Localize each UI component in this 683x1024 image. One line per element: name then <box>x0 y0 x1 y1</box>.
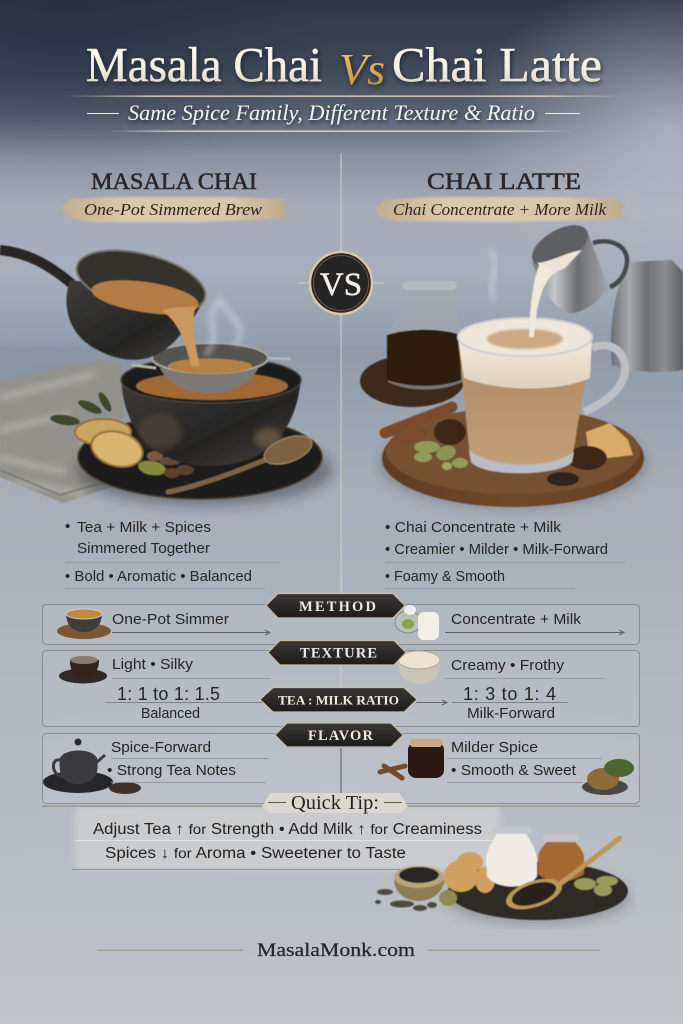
heading: Masala Chai column: MASALA CHAI <box>91 169 257 195</box>
brass bowl of tea <box>394 866 445 901</box>
towel <box>0 359 124 503</box>
ratio right <box>452 684 568 722</box>
jaggery <box>444 852 495 893</box>
heading: Masala Chai column <box>60 169 288 222</box>
jaggery and cloves <box>547 423 633 486</box>
badge: tea milk ratio: TEA : MILK RATIO <box>278 692 399 708</box>
milk jar <box>486 826 537 886</box>
title: Chai Latte: Chai Latte <box>392 37 602 92</box>
ginger slices <box>75 419 147 472</box>
panel: flavor: • Smooth & Sweet <box>451 762 577 779</box>
arrow: method left <box>112 630 270 635</box>
panel: flavor: Spice-Forward <box>111 739 211 756</box>
icon: concentrate and milk jars <box>395 605 439 640</box>
scattered tea leaves <box>375 889 437 911</box>
badge: flavor <box>275 723 403 747</box>
photo: masala chai pour <box>0 239 333 506</box>
brush banner left <box>60 197 288 222</box>
badge: method: METHOD <box>299 599 376 615</box>
left bullet list <box>65 518 280 589</box>
quick tip panel: Quick Tip: <box>291 792 379 814</box>
wooden spoon with peppercorns <box>502 838 620 915</box>
brush banner right <box>375 197 625 222</box>
gold spoon <box>168 430 316 492</box>
honey jar <box>538 834 584 882</box>
badge: texture: TEXTURE <box>300 646 377 662</box>
title: vs script: Vs <box>339 45 385 94</box>
VS badge <box>298 252 384 314</box>
spices left of cup <box>414 419 468 470</box>
bowl <box>121 357 301 466</box>
left bullet list: • Bold • Aromatic • Balanced <box>65 568 252 585</box>
panel: method <box>42 604 640 644</box>
heading: Chai Latte column: Chai Concentrate + More Milk <box>393 200 606 219</box>
cinnamon sticks <box>385 407 452 444</box>
right bullet list: • Foamy & Smooth <box>385 568 505 585</box>
slate board <box>446 862 630 924</box>
footer with website: MasalaMonk.com <box>257 940 415 961</box>
glass cup <box>458 318 625 473</box>
steam <box>490 250 495 300</box>
panel: flavor <box>42 734 640 804</box>
center divider <box>340 153 342 593</box>
panel: method: Concentrate + Milk <box>451 611 582 628</box>
icon: black teapot <box>43 738 141 794</box>
badge: flavor: FLAVOR <box>308 728 374 744</box>
chai pouring stream <box>162 306 200 366</box>
photo: ingredients tray <box>375 826 630 924</box>
left bullet list: Tea + Milk + Spices <box>77 519 211 536</box>
ratio right: 1: 3 to 1: 4 <box>463 684 556 704</box>
panel: texture and ratio: Light • Silky <box>112 656 194 673</box>
ratio left <box>105 684 263 722</box>
ratio left: 1: 1 to 1: 1.5 <box>117 684 220 704</box>
right bullet list: • Chai Concentrate + Milk <box>385 519 562 536</box>
right bullet list <box>385 519 625 589</box>
arrow: ratio <box>416 700 447 705</box>
plate <box>77 415 333 506</box>
badge: texture <box>268 640 406 665</box>
icon: syrup jar with cinnamon <box>380 739 444 778</box>
tip line one: Adjust Tea ↑ for Strength • Add Milk ↑ for Creaminess <box>93 821 482 838</box>
quick tip heading tab <box>262 793 408 813</box>
wooden board <box>380 408 646 508</box>
icon: foamy milk bowl <box>398 651 440 684</box>
badge: tea milk ratio <box>260 688 417 712</box>
quick tip panel <box>42 792 640 870</box>
title: Masala Chai: Masala Chai <box>86 37 322 92</box>
milk pitcher <box>525 217 627 313</box>
heading: Chai Latte column <box>375 169 625 222</box>
panel: texture and ratio <box>42 650 640 726</box>
ratio left: Balanced <box>141 705 200 722</box>
tip line two: Spices ↓ for Aroma • Sweetener to Taste <box>105 845 406 862</box>
panel: flavor: Milder Spice <box>451 739 538 756</box>
panel: texture and ratio: Creamy • Frothy <box>451 657 565 674</box>
icon: tea cup on wooden saucer <box>57 609 111 639</box>
spices on plate <box>137 451 194 478</box>
heading: Masala Chai column: One-Pot Simmered Brew <box>84 200 263 219</box>
arrow: method right <box>445 630 624 635</box>
syrup jar on tray <box>360 281 464 407</box>
right bullet list: • Creamier • Milder • Milk-Forward <box>385 541 608 558</box>
heading: Chai Latte column: CHAI LATTE <box>427 169 581 195</box>
left bullet list: Simmered Together <box>77 540 210 557</box>
steam <box>205 300 240 355</box>
curry leaves <box>49 390 114 427</box>
saucepan <box>0 239 212 360</box>
cardamom pods <box>574 876 618 896</box>
subtitle with rules: Same Spice Family, Different Texture & Ratio <box>128 100 535 125</box>
VS badge: VS <box>320 267 362 303</box>
cardamom by bowl <box>439 890 457 906</box>
title <box>86 37 602 94</box>
panel: flavor: • Strong Tea Notes <box>107 762 236 779</box>
photo: chai latte pour <box>360 217 683 508</box>
icon: spice bowl with herb <box>582 759 634 795</box>
panel: method: One-Pot Simmer <box>112 611 229 628</box>
ratio right: Milk-Forward <box>467 705 555 722</box>
strainer <box>132 343 290 393</box>
left bullet list: • <box>65 518 70 535</box>
steel kettle <box>611 260 683 372</box>
badge: method <box>266 594 405 618</box>
milk stream <box>529 264 555 337</box>
icon: dark tea cup <box>59 656 107 684</box>
